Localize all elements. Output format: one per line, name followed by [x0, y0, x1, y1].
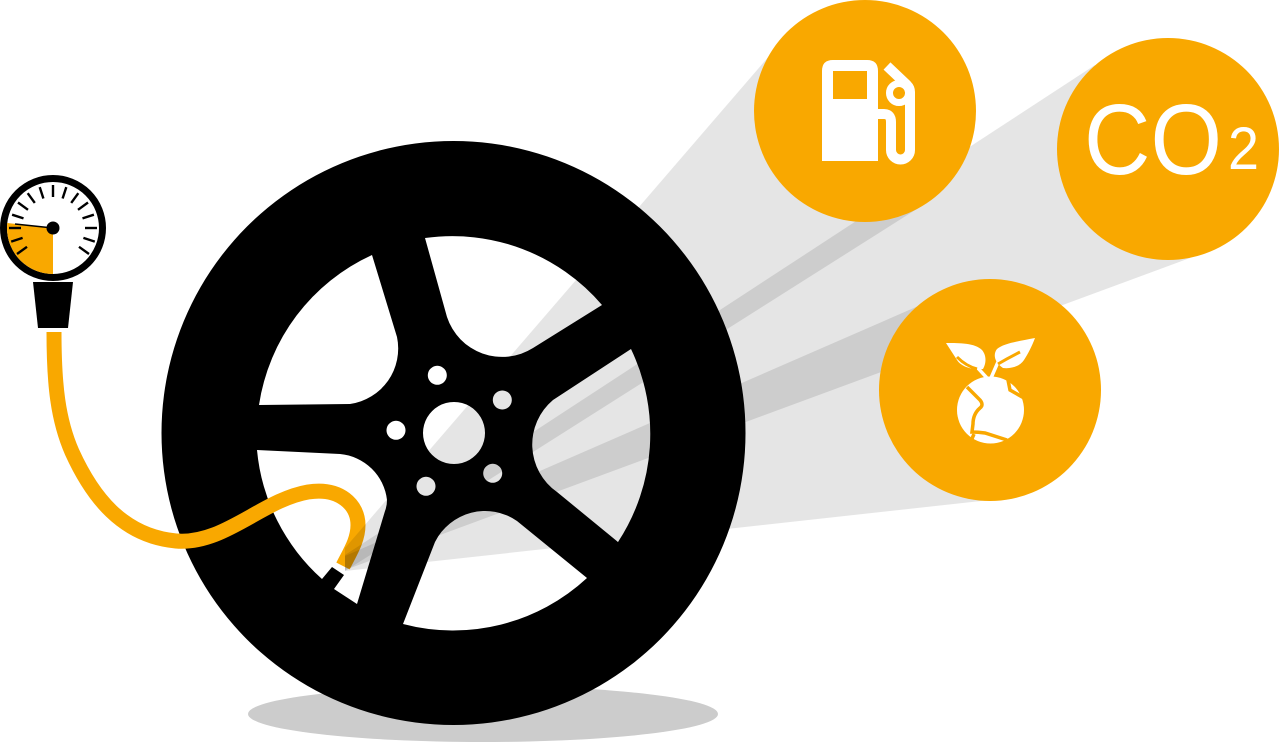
low pressure sector	[7, 223, 53, 274]
gauge dial	[4, 178, 102, 278]
CO2 label: CO	[1084, 84, 1222, 196]
beam: CO2	[345, 65, 1190, 570]
icon: globe with sprout	[946, 338, 1035, 444]
valve connector	[335, 563, 350, 572]
air hose	[54, 332, 358, 566]
needle	[15, 224, 53, 228]
CO2 circle	[1057, 38, 1279, 260]
environment circle	[879, 279, 1101, 501]
ground shadow	[248, 686, 718, 742]
light beams	[345, 55, 1190, 571]
wheel with spokes	[162, 141, 746, 725]
gauge neck	[33, 282, 73, 328]
needle hub	[46, 222, 60, 234]
fuel circle	[754, 0, 976, 222]
tick marks	[9, 185, 97, 254]
beam: environment	[345, 290, 990, 571]
pressure gauge	[4, 178, 102, 328]
subscript 2: 2	[1228, 115, 1259, 182]
beam: fuel	[345, 55, 920, 571]
icon: fuel pump	[822, 60, 910, 161]
